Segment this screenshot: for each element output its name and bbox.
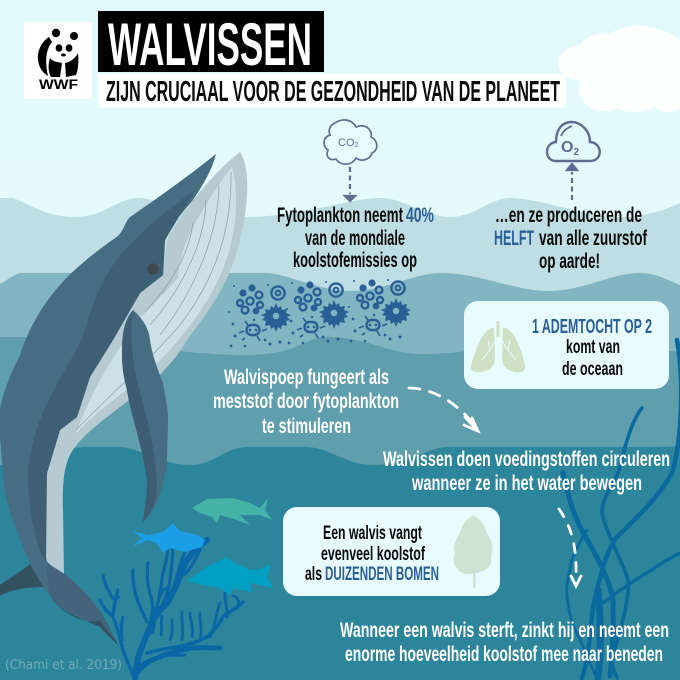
text: fytoplankton: koolstofemissies op (293, 249, 417, 272)
wave layer 1 (0, 198, 680, 680)
whale body (0, 154, 216, 598)
card: bomen (283, 507, 500, 596)
whale (0, 152, 247, 646)
icon: CO2 cloud: 2 (354, 142, 358, 149)
arrow: O2 up (567, 164, 577, 200)
whale tail fluke right (47, 563, 119, 646)
fish teal (187, 557, 273, 595)
text: voedingstoffen (383, 447, 670, 495)
source: (Chami et al. 2019) (5, 657, 122, 673)
text: fytoplankton: Fytoplankton neemt (277, 204, 403, 227)
card: bomen: evenveel koolstof (321, 544, 425, 565)
icon: lungs (471, 320, 525, 372)
panda (38, 29, 78, 77)
text: zuurstof (494, 204, 648, 273)
icon: CO2 cloud: CO (338, 137, 354, 149)
title: WALVISSEN (108, 11, 312, 78)
whale tail fluke left (0, 564, 44, 596)
text: fytoplankton (277, 204, 434, 272)
text: sterft (340, 618, 669, 666)
card: ademtocht (464, 301, 669, 389)
wave layer 2 (0, 273, 680, 680)
whale belly (38, 152, 247, 576)
fytoplankton cluster 3 (348, 279, 411, 342)
fytoplankton cluster 1 (228, 284, 291, 347)
arrow: white curved 1 (409, 388, 478, 431)
whale body shadow (28, 190, 195, 563)
card: ademtocht: komt van (566, 336, 620, 358)
arrow: white curved 2 (559, 509, 581, 586)
fytoplankton cluster 2 (286, 281, 349, 344)
kelp right (563, 340, 680, 678)
text: walvispoep: meststof door fytoplankton (213, 389, 399, 413)
card: bomen: DUIZENDEN BOMEN (325, 564, 439, 585)
text: zuurstof: HELFT (494, 227, 534, 250)
text: walvispoep: te stimuleren (262, 414, 351, 438)
whale eye (147, 263, 159, 275)
fish blue (132, 523, 205, 553)
icon: tree (454, 516, 492, 588)
icon: O2 cloud (547, 122, 600, 161)
cloud (558, 25, 680, 112)
card: bomen: als (305, 564, 322, 585)
icon: CO2 cloud (324, 120, 377, 164)
fish green (192, 498, 272, 525)
arrow: CO2 down (345, 167, 355, 201)
card: bomen: Een walvis vangt (323, 523, 422, 544)
text: fytoplankton: van de mondiale (305, 227, 405, 250)
title (98, 11, 324, 78)
whale baleen (76, 166, 236, 433)
card: ademtocht: de oceaan (562, 358, 623, 380)
icon: O2 cloud: O (561, 139, 573, 156)
whale flipper (122, 310, 168, 522)
coral bottom (100, 540, 243, 680)
text: fytoplankton: 40% (406, 204, 434, 227)
logo panel (24, 22, 92, 99)
icon: O2 cloud: 2 (573, 147, 579, 158)
text: walvispoep (213, 365, 399, 438)
wave layer 3 (0, 337, 680, 680)
logo text WWF: WWF (39, 77, 78, 92)
wave layer 4 deep water (0, 446, 680, 680)
text: zuurstof: op aarde! (539, 250, 600, 273)
text: walvispoep: Walvispoep fungeert als (224, 365, 389, 389)
